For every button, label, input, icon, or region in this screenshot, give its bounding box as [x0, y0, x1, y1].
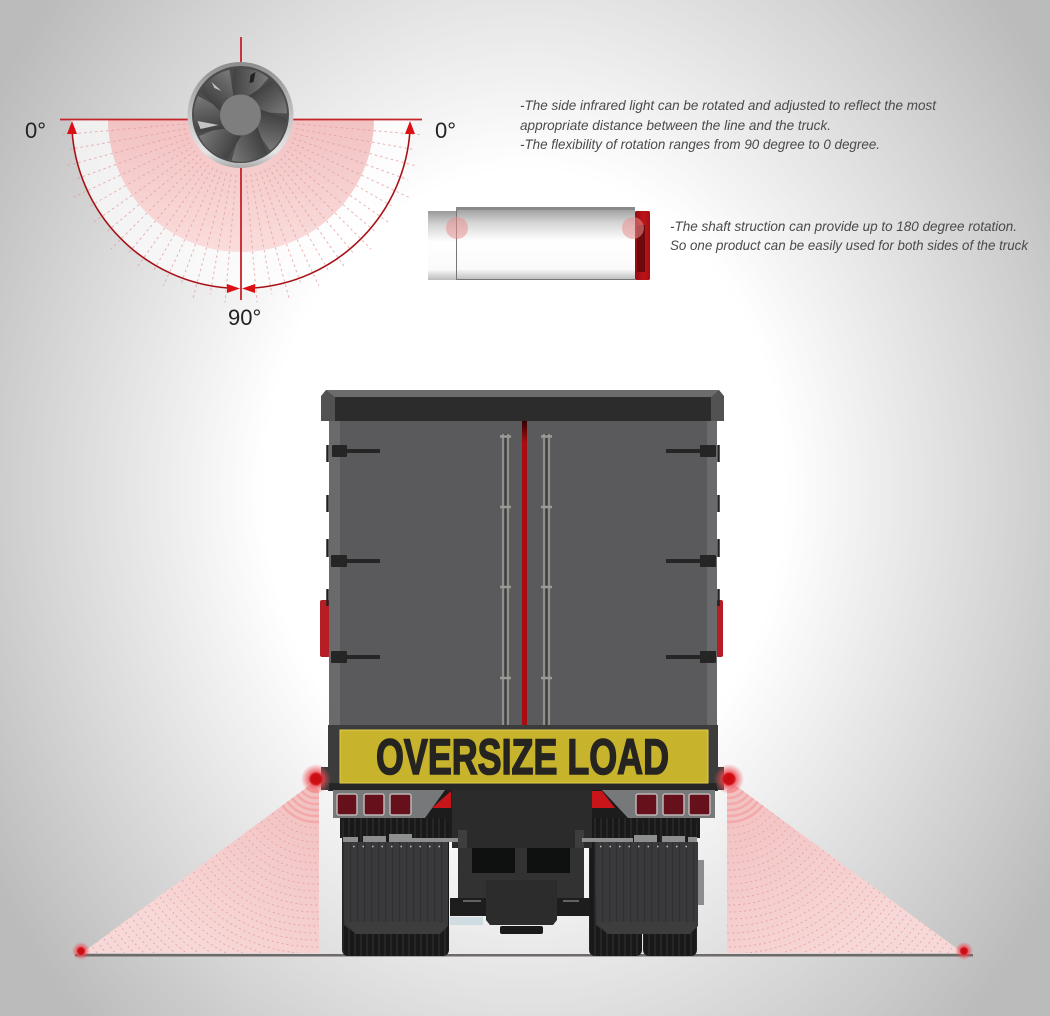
label: right 0 degrees: 0° [435, 118, 456, 143]
text block: rotation description: appropriate distance between the line and the truck. [520, 117, 831, 133]
text block: shaft description [670, 218, 1029, 253]
text block: rotation description: -The flexibility of rotation ranges from 90 degree to 0 degree. [520, 136, 880, 152]
left ground light beam [84, 785, 319, 953]
mud flaps [343, 834, 698, 934]
text block: shaft description: -The shaft struction can provide up to 180 degree rotation. [670, 218, 1017, 234]
centre red seam [522, 421, 527, 731]
side lamps [320, 600, 723, 657]
icon: fan sensor [188, 62, 294, 169]
text block: rotation description [520, 97, 937, 152]
label: 90 degrees: 90° [228, 305, 261, 330]
trailer body [329, 420, 717, 772]
dashed rays [61, 124, 421, 302]
centre underframe [450, 790, 592, 934]
door latches [331, 445, 716, 663]
oversize load sign: OVERSIZE LOAD [376, 729, 669, 785]
axis lines [60, 37, 422, 300]
bumper frame [321, 725, 724, 791]
rotation arcs [72, 130, 410, 288]
left ground point [72, 942, 90, 960]
tail lights [337, 794, 710, 815]
arrowheads [67, 121, 415, 293]
outer pale band [71, 119, 411, 289]
text block: shaft description: So one product can be easily used for both sides of the truck [670, 237, 1029, 253]
label: left 0 degrees: 0° [25, 118, 46, 143]
rotation diagram [25, 37, 456, 330]
rear wheels [340, 790, 704, 956]
truck rear view [320, 390, 724, 956]
left sensor glow [301, 764, 331, 794]
pink light sector [108, 119, 374, 252]
text block: rotation description: -The side infrared light can be rotated and adjusted to reflect the most [520, 97, 937, 113]
right ground point [955, 942, 973, 960]
side clips [328, 445, 718, 606]
ground line [75, 954, 973, 956]
right ground light beam [727, 785, 960, 953]
icon: shaft side view [428, 207, 650, 280]
lamp panels [333, 790, 715, 818]
door rods [500, 434, 552, 730]
right sensor glow [714, 764, 744, 794]
roof cap [321, 390, 724, 421]
